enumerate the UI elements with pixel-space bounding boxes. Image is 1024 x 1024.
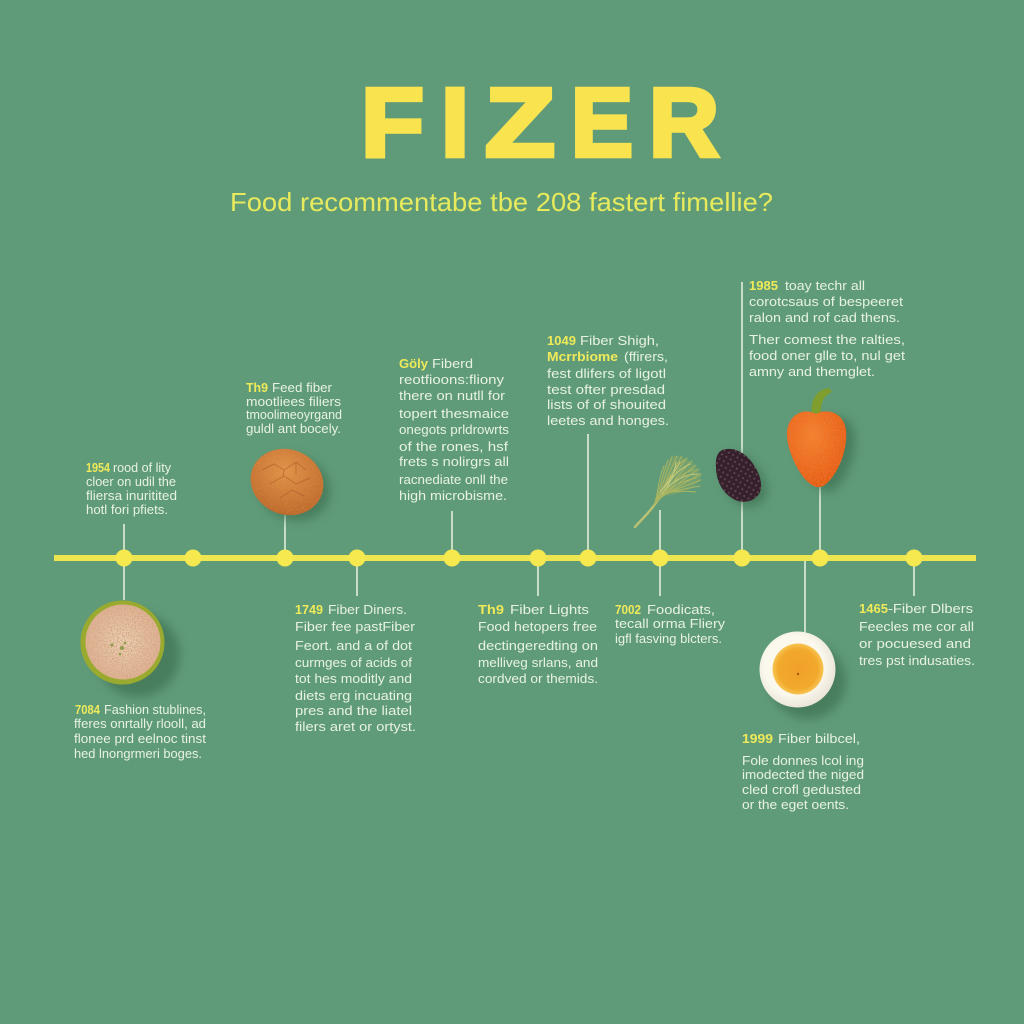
- text block: Goly Fiberd: Fiberd: [432, 357, 473, 371]
- text block: 7002 Foodicats: [615, 603, 726, 646]
- text block: 1985: [749, 279, 906, 379]
- icon: egg yolk bowl: [760, 632, 846, 719]
- text block: Th9 Feed fiber: mootliees filiers: [246, 395, 341, 409]
- text block: 1985: amny and themglet.: [749, 365, 875, 379]
- icon: blackberry: [716, 449, 767, 507]
- text block: 1465 Fiber Dlbers: [859, 602, 975, 668]
- text block: 1049 Fiber Shigh: leetes and honges.: [547, 414, 669, 428]
- text block: 1749 Fiber Diners: tot hes moditly and: [295, 672, 412, 686]
- icon: bread roll: [241, 438, 340, 532]
- text block: 7084 Fashion: 7084: [75, 703, 100, 717]
- title: R: [649, 68, 719, 177]
- text block: Th9 Feed fiber: tmoolimeoyrgand: [246, 408, 342, 422]
- text block: 1049 Fiber Shigh: Mcrrbiome: [547, 350, 618, 364]
- text block: Goly Fiberd: [399, 357, 509, 503]
- text block: 7084 Fashion: hed lnongrmeri boges.: [74, 747, 202, 761]
- text block: Goly Fiberd: racnediate onll the: [399, 473, 508, 487]
- text block: Th9 Feed fiber: Th9: [246, 381, 268, 395]
- text block: 1985: 1985: [749, 279, 778, 293]
- text block: Goly Fiberd: frets s nolirgrs all: [399, 455, 509, 469]
- text block: 1985: food oner glle to, nul get: [749, 349, 906, 363]
- text block: 1749 Fiber Diners: Feort. and a of dot: [295, 639, 413, 653]
- text block: 1954: fliersa inuritited: [86, 489, 177, 503]
- text block: 1749 Fiber Diners: [295, 603, 416, 734]
- text block: 1999 Fiber bilbcel: Fiber bilbcel,: [778, 732, 860, 746]
- title: F: [361, 68, 424, 177]
- text block: Th9 Fiber Lights: Th9: [478, 603, 504, 617]
- text block: Goly Fiberd: topert thesmaice: [399, 407, 509, 421]
- text block: 7084 Fashion: flonee prd eelnoc tinst: [74, 732, 207, 746]
- text block: 1049 Fiber Shigh: fest dlifers of ligotl: [547, 367, 666, 381]
- text block: 1749 Fiber Diners: 1749: [295, 603, 323, 617]
- text block: Th9 Fiber Lights: cordved or themids.: [478, 672, 598, 686]
- icon: orange pepper: [787, 388, 855, 492]
- text block: 1999 Fiber bilbcel: 1999: [742, 732, 773, 746]
- text block: 7002 Foodicats: 7002: [615, 603, 641, 617]
- text block: Th9 Feed fiber: [246, 381, 342, 436]
- text block: 1465 Fiber Dlbers: 1465: [859, 602, 888, 616]
- title: Z: [485, 68, 555, 177]
- text block: 1465 Fiber Dlbers: -Fiber Dlbers: [888, 602, 973, 616]
- text block: Th9 Fiber Lights: melliveg srlans, and: [478, 656, 598, 670]
- text block: 1465 Fiber Dlbers: or pocuesed and: [859, 637, 971, 651]
- text block: Th9 Fiber Lights: [478, 603, 598, 686]
- icon: rice bowl: [80, 600, 180, 697]
- text block: 7002 Foodicats: Foodicats,: [647, 603, 715, 617]
- text block: 1999 Fiber bilbcel: imodected the niged: [742, 768, 864, 782]
- text block: 1999 Fiber bilbcel: or the eget oents.: [742, 798, 849, 812]
- text block: 1999 Fiber bilbcel: cled crofl gedusted: [742, 783, 861, 797]
- text block: 1985: Ther comest the ralties,: [749, 333, 905, 347]
- title: [361, 68, 719, 177]
- text block: 1985: toay techr all: [785, 279, 865, 293]
- text block: 1049 Fiber Shigh: 1049: [547, 334, 576, 348]
- text block: 7002 Foodicats: tecall orma Fliery: [615, 617, 726, 631]
- connector lines: [124, 282, 914, 634]
- title: I: [441, 68, 469, 177]
- text block: 1749 Fiber Diners: Fiber Diners.: [328, 603, 407, 617]
- text block: 7084 Fashion: [74, 703, 207, 761]
- text block: Goly Fiberd: there on nutll for: [399, 389, 505, 403]
- text block: Th9 Fiber Lights: dectingeredting on: [478, 639, 598, 653]
- text block: 1049 Fiber Shigh: Fiber Shigh,: [580, 334, 659, 348]
- text block: Goly Fiberd: of the rones, hsf: [399, 440, 509, 454]
- text block: 1749 Fiber Diners: curmges of acids of: [295, 656, 413, 670]
- icon: grass sprig: [635, 456, 701, 527]
- text block: Th9 Feed fiber: guldl ant bocely.: [246, 422, 341, 436]
- text block: 1749 Fiber Diners: filers aret or ortyst.: [295, 720, 416, 734]
- text block: 1749 Fiber Diners: diets erg incuating: [295, 689, 412, 703]
- axis bar: [54, 555, 976, 561]
- subtitle: Food recommentabe tbe 208 fastert fimellie?: [230, 187, 773, 217]
- timeline: [54, 282, 976, 634]
- text block: 1954: rood of lity: [113, 461, 172, 475]
- text block: 1954: hotl fori pfiets.: [86, 503, 168, 517]
- text block: Th9 Feed fiber: Feed fiber: [272, 381, 332, 395]
- text block: 1049 Fiber Shigh: test ofter presdad: [547, 383, 665, 397]
- text block: 1985: corotcsaus of bespeeret: [749, 295, 904, 309]
- text block: 1954: [86, 461, 177, 517]
- text block: 1465 Fiber Dlbers: Feecles me cor all: [859, 620, 974, 634]
- text block: 1954: cloer on udil the: [86, 475, 176, 489]
- text block: Goly Fiberd: Göly: [399, 357, 428, 371]
- text block: 1985: ralon and rof cad thens.: [749, 311, 900, 325]
- text block: 1999 Fiber bilbcel: [742, 732, 864, 812]
- text block: 1049 Fiber Shigh: lists of of shouited: [547, 398, 666, 412]
- text block: 7002 Foodicats: igfl fasving blcters.: [615, 632, 722, 646]
- text block: Goly Fiberd: onegots prldrowrts: [399, 423, 509, 437]
- text block: 1999 Fiber bilbcel: Fole donnes lcol ing: [742, 754, 864, 768]
- text block: 1049 Fiber Shigh: (ffirers,: [624, 350, 668, 364]
- text block: 1749 Fiber Diners: Fiber fee pastFiber: [295, 620, 415, 634]
- text block: 1049 Fiber Shigh: [547, 334, 669, 428]
- title: E: [571, 68, 633, 177]
- text block: Goly Fiberd: high microbisme.: [399, 489, 507, 503]
- text block: 7084 Fashion: Fashion stublines,: [104, 703, 206, 717]
- text block: 7084 Fashion: fferes onrtally rlooll, ad: [74, 717, 206, 731]
- text block: 1749 Fiber Diners: pres and the liatel: [295, 704, 412, 718]
- nodes: [116, 550, 922, 566]
- text block: Goly Fiberd: reotfioons:fliony: [399, 373, 505, 387]
- text block: 1465 Fiber Dlbers: tres pst indusaties.: [859, 654, 975, 668]
- text block: Th9 Fiber Lights: Fiber Lights: [510, 603, 589, 617]
- text block: 1954: 1954: [86, 461, 110, 475]
- text block: Th9 Fiber Lights: Food hetopers free: [478, 620, 597, 634]
